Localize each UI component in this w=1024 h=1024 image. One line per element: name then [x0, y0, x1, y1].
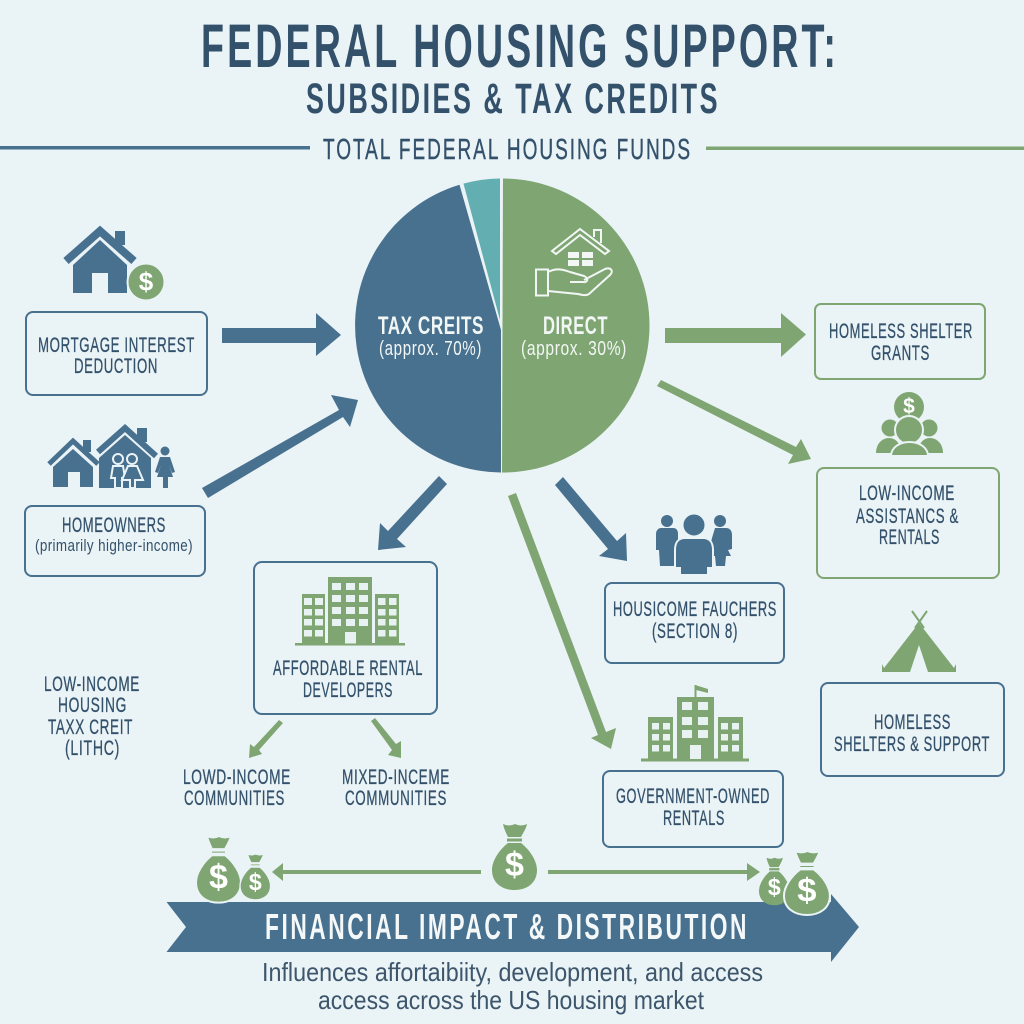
pie label: direct: DIRECT — [543, 312, 608, 340]
icon: homes and family — [49, 428, 175, 488]
text block: low-income housing tax credit — [44, 673, 140, 760]
label: mixed-income communities: COMMUNITIES — [345, 787, 447, 810]
box: housing vouchers: (SECTION 8) — [652, 620, 738, 643]
caption — [262, 957, 763, 1015]
icon: money bag center: $ — [505, 846, 524, 884]
pie slice: tax credits — [355, 185, 502, 473]
icon: people with dollar coin: $ — [903, 395, 915, 418]
arrow: mortgage deduction to tax credits — [222, 313, 341, 356]
box: homeowners: (primarily higher-income) — [35, 536, 193, 555]
arrow: direct to homeless shelter grants — [665, 313, 806, 357]
icon: money bag right small: $ — [768, 874, 781, 901]
box: government-owned rentals: GOVERNMENT-OWNED — [616, 785, 770, 808]
arrow: direct to government rentals — [508, 493, 616, 749]
text block: low-income housing tax credit: (LITHC) — [65, 737, 120, 760]
panel text: AFFORDABLE RENTAL — [273, 657, 423, 680]
icon: hand holding house — [536, 229, 612, 296]
icon: government building with flag — [641, 685, 749, 762]
box: mortgage interest deduction: DEDUCTION — [74, 355, 158, 378]
icon: money bag left large: $ — [209, 858, 228, 897]
text block: low-income housing tax credit: HOUSING — [58, 694, 127, 717]
icon: money bag left small: $ — [249, 869, 262, 895]
panel: affordable rental developers — [254, 562, 437, 714]
arrow: direct to low-income assistance — [657, 380, 811, 464]
label: mixed-income communities: MIXED-INCEME — [342, 766, 450, 789]
box: low-income assistance and rentals: ASSISTANCS & — [856, 505, 959, 528]
text block: low-income housing tax credit: TAXX CREIT — [48, 716, 133, 739]
box: government-owned rentals: RENTALS — [663, 807, 725, 830]
text block: low-income housing tax credit: LOW-INCOME — [44, 673, 140, 696]
icon: house with dollar coin — [66, 231, 164, 300]
box: homeless shelter grants: GRANTS — [871, 342, 930, 365]
box: homeless shelter grants — [815, 304, 985, 379]
pie label: direct — [521, 312, 627, 360]
icon: people group — [656, 514, 732, 575]
icon: money bag right small — [759, 858, 790, 905]
banner: financial impact and distribution: FINANCIAL IMPACT & DISTRIBUTION — [265, 906, 749, 947]
icon: money bag left small — [240, 854, 271, 900]
icon: money bag right large — [784, 851, 830, 915]
box: homeless shelters and support: HOMELESS — [874, 711, 951, 734]
box: low-income assistance and rentals: LOW-INCOME — [859, 482, 955, 505]
label: low-income communities: LOWD-INCOME — [183, 766, 291, 789]
caption: access across the US housing market — [318, 985, 705, 1015]
box: government-owned rentals — [603, 771, 783, 847]
arrow: developers to mixed-income communities — [371, 718, 401, 758]
arrow: distribution right — [548, 863, 760, 881]
panel text: DEVELOPERS — [303, 679, 393, 702]
icon: apartment buildings — [295, 577, 405, 646]
icon: tent — [882, 611, 956, 672]
icon: money bag center — [492, 824, 537, 890]
arrow: tax credits to housing vouchers — [555, 477, 627, 561]
pie label: tax credits — [378, 312, 484, 360]
box: homeless shelters and support — [821, 683, 1004, 776]
icon: house with dollar coin: $ — [139, 266, 154, 296]
label: mixed-income communities — [342, 766, 450, 810]
arrow: developers to low-income communities — [249, 720, 283, 758]
arrow: homeowners to tax credits — [202, 395, 358, 498]
pie label: tax credits: TAX CREITS — [378, 312, 484, 340]
label: low-income communities — [183, 766, 291, 810]
caption: Influences affortaibiity, development, and access — [262, 957, 763, 987]
icon: money bag right large: $ — [797, 872, 817, 909]
icon: money bag left large — [196, 836, 241, 903]
box: housing vouchers: HOUSICOME FAUCHERS — [613, 598, 777, 621]
subtitle: SUBSIDIES & TAX CREDITS — [306, 75, 720, 123]
box: low-income assistance and rentals — [817, 468, 999, 578]
arrow: distribution left — [272, 863, 481, 881]
pie slice: teal other — [464, 178, 500, 320]
box: homeowners: HOMEOWNERS — [62, 514, 166, 537]
box: housing vouchers — [605, 583, 784, 663]
panel text — [273, 657, 423, 702]
pie chart: total federal housing funds — [355, 178, 650, 473]
label: low-income communities: COMMUNITIES — [184, 787, 285, 810]
banner: financial impact and distribution — [166, 894, 859, 962]
section heading with rules — [0, 134, 1024, 166]
box: homeowners — [25, 506, 205, 576]
pie slice: direct — [502, 178, 650, 473]
box: low-income assistance and rentals: RENTALS — [879, 526, 940, 549]
box: mortgage interest deduction: MORTGAGE INTEREST — [38, 334, 195, 357]
section heading text: TOTAL FEDERAL HOUSING FUNDS — [323, 134, 692, 166]
pie label: tax credits: (approx. 70%) — [379, 338, 482, 360]
box: mortgage interest deduction — [26, 312, 207, 395]
icon: people with dollar coin — [876, 392, 943, 456]
arrow: tax credits to developers — [378, 476, 447, 550]
pie label: direct: (approx. 30%) — [521, 338, 627, 360]
